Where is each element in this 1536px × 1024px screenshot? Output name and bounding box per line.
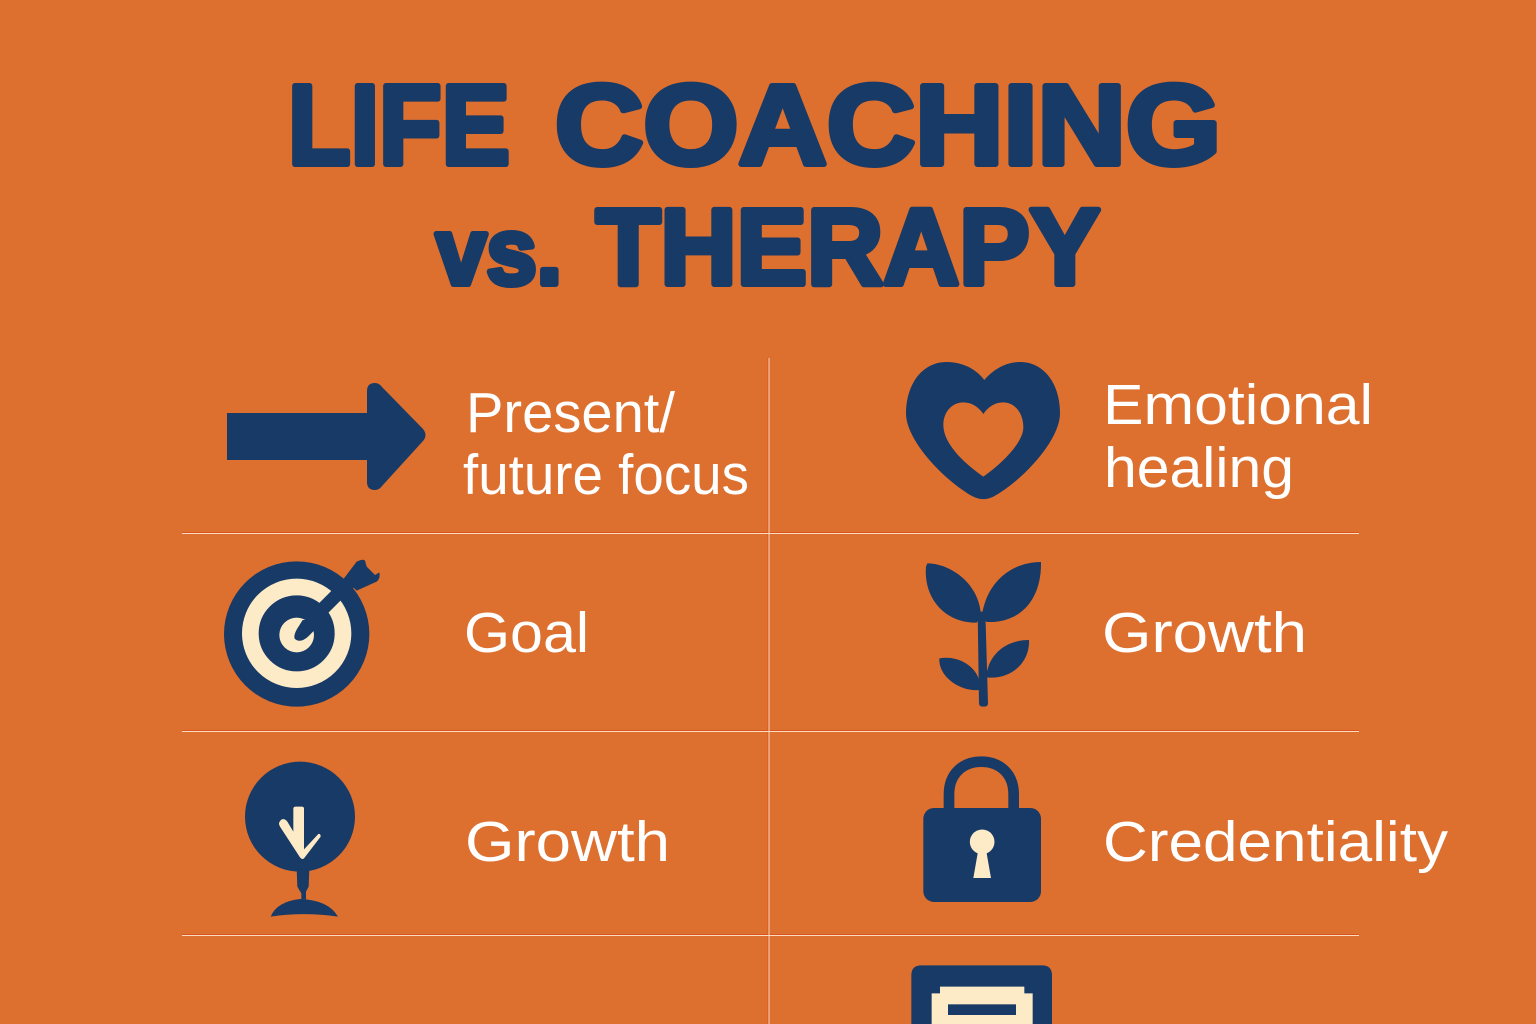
text: growth (coaching): Growth xyxy=(465,810,670,874)
text: emotional healing xyxy=(1103,373,1373,500)
icon: clipboard xyxy=(911,965,1052,1024)
title: THERAPY xyxy=(596,186,1100,307)
title: LIFE xyxy=(288,62,510,188)
title: vs. xyxy=(436,199,562,305)
text: credentiality: Credentiality xyxy=(1103,810,1449,874)
text: emotional healing: healing xyxy=(1104,436,1294,500)
icon: heart xyxy=(906,362,1060,499)
icon: padlock xyxy=(923,762,1041,902)
icon: arrow xyxy=(227,383,426,490)
icon: target with arrow xyxy=(224,560,380,707)
text: goal: Goal xyxy=(464,601,589,665)
icon: pin with down arrow xyxy=(245,762,355,917)
text: emotional healing: Emotional xyxy=(1103,373,1373,437)
text: present/future focus: Present/ xyxy=(466,381,675,445)
text: present/future focus: future focus xyxy=(463,443,749,507)
icon: plant xyxy=(926,562,1041,707)
title: COACHING xyxy=(555,62,1221,188)
text: growth (therapy): Growth xyxy=(1102,601,1307,665)
title xyxy=(288,62,1221,307)
text: present/future focus xyxy=(463,381,749,507)
